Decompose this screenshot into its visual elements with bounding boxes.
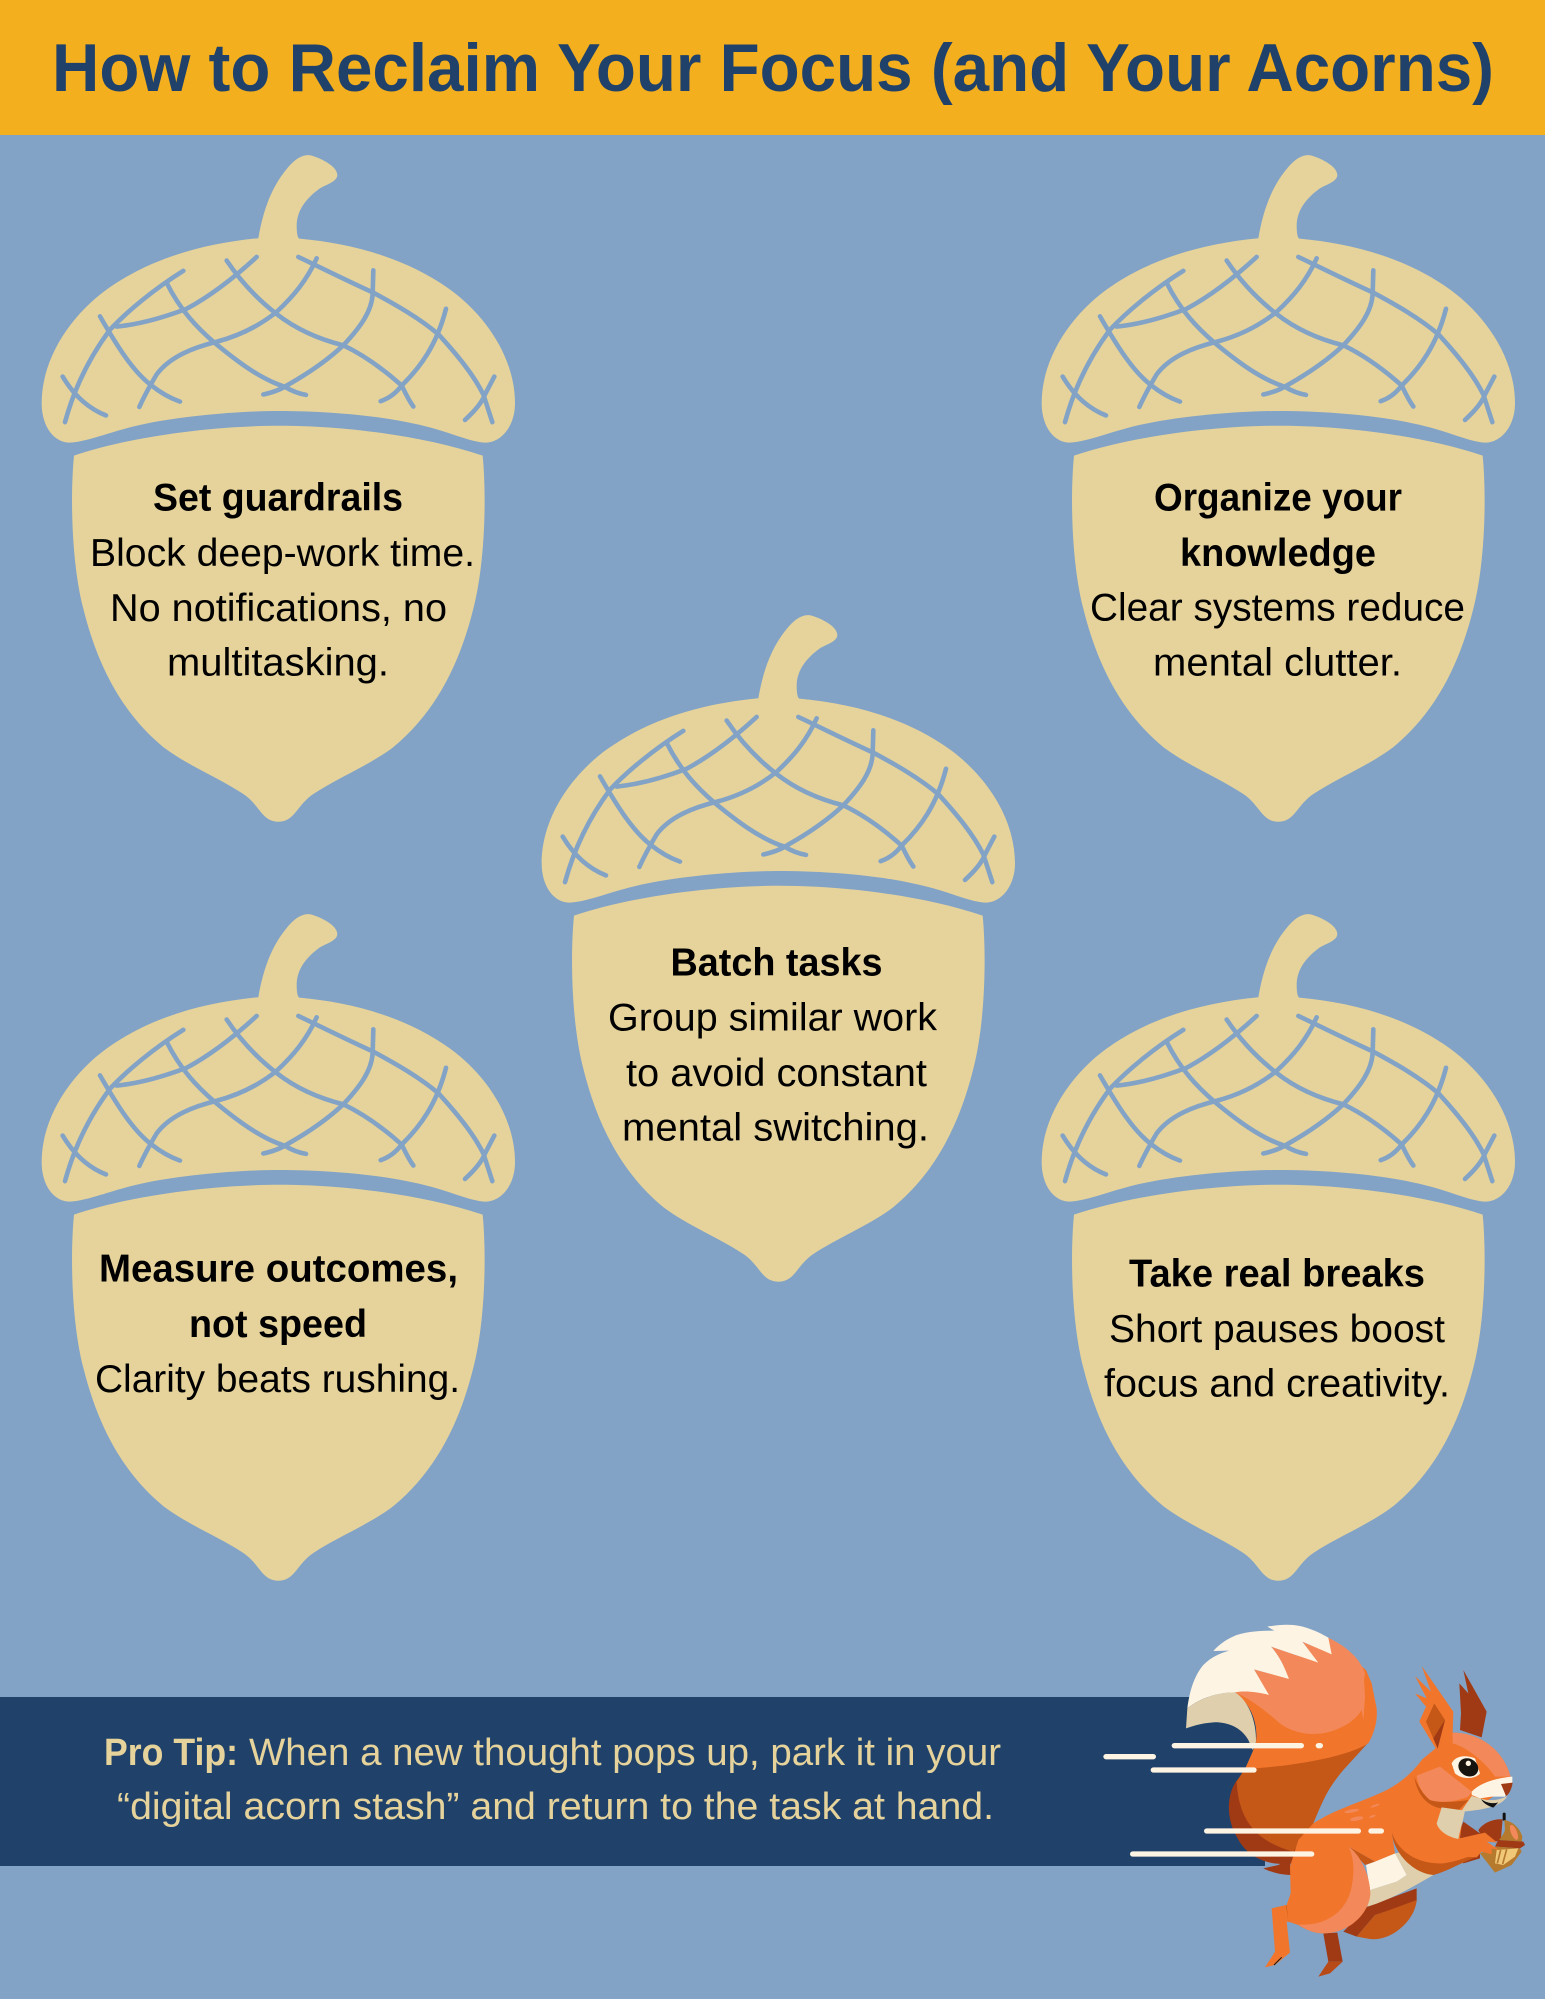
- near hand: [1460, 1833, 1499, 1857]
- held acorn: [1478, 1813, 1525, 1873]
- far haunch: [1343, 1888, 1417, 1939]
- acorn card: Organize your knowledge: mental clutter.: [1153, 642, 1402, 684]
- acorn card: Take real breaks: [1042, 914, 1515, 1581]
- acorn card: Measure outcomes, not speed: [42, 914, 515, 1581]
- pro tip text: [104, 1732, 1001, 1828]
- belly: [1366, 1852, 1433, 1907]
- acorn card: Set guardrails: Set guardrails: [153, 476, 403, 520]
- acorn card: Batch tasks: Batch tasks: [670, 942, 882, 984]
- near hind leg: [1265, 1835, 1370, 1967]
- acorn card: Set guardrails: multitasking.: [167, 642, 389, 684]
- back ear: [1459, 1670, 1487, 1737]
- fur marks: [1344, 1803, 1380, 1822]
- speed lines: [1103, 1743, 1384, 1857]
- acorn card: Measure outcomes, not speed: Clarity beats rushing.: [95, 1358, 460, 1401]
- acorn card: Measure outcomes, not speed: not speed: [189, 1303, 367, 1346]
- acorn card: Batch tasks: mental switching.: [622, 1106, 929, 1150]
- icon: running squirrel with acorn: [1103, 1625, 1525, 1977]
- acorn card: Batch tasks: [542, 615, 1015, 1282]
- acorn card: Set guardrails: Block deep-work time.: [90, 532, 475, 575]
- acorn card: Organize your knowledge: knowledge: [1180, 532, 1376, 575]
- acorn card: Take real breaks: Short pauses boost: [1109, 1308, 1445, 1351]
- pro tip text: Pro Tip:: [104, 1732, 238, 1774]
- acorn card: Organize your knowledge: [1042, 155, 1515, 822]
- header banner with title: [0, 0, 1545, 135]
- pro tip text: “digital acorn stash” and return to the task at hand.: [117, 1786, 994, 1828]
- acorn card: Take real breaks: Take real breaks: [1129, 1252, 1425, 1296]
- arm shadow: [1392, 1832, 1483, 1875]
- acorn card: Batch tasks: to avoid constant: [626, 1052, 927, 1095]
- acorn card: Measure outcomes, not speed: Measure outcomes,: [99, 1248, 458, 1291]
- acorn card: Batch tasks: Group similar work: [608, 996, 937, 1040]
- pro tip bar: [0, 1697, 1265, 1866]
- acorn card: Take real breaks: focus and creativity.: [1104, 1362, 1450, 1406]
- head: [1414, 1666, 1513, 1839]
- far arm: [1453, 1822, 1480, 1863]
- acorn card: Organize your knowledge: Clear systems reduce: [1090, 587, 1465, 630]
- shadow wedge under body: [1347, 1846, 1375, 1865]
- acorn card: Set guardrails: [42, 155, 515, 822]
- torso and forearm: [1298, 1733, 1485, 1863]
- title: How to Reclaim Your Focus (and Your Acorns): [52, 30, 1494, 106]
- rear far leg: [1318, 1933, 1343, 1977]
- acorn card: Organize your knowledge: Organize your: [1154, 477, 1402, 520]
- tail: [1186, 1625, 1377, 1875]
- acorn card: Set guardrails: No notifications, no: [110, 587, 447, 630]
- pro tip text: When a new thought pops up, park it in your: [249, 1732, 1001, 1774]
